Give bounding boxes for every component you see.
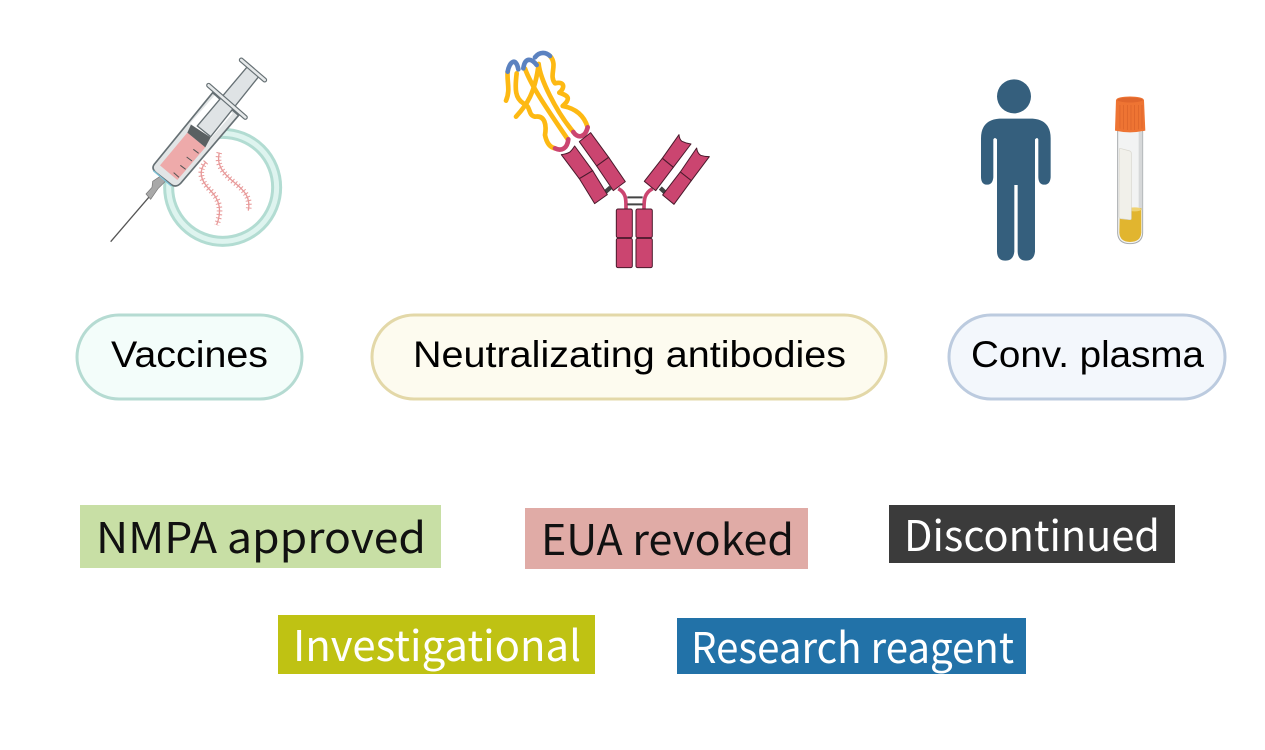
legend tag: Research reagent: Research reagent: [691, 615, 1014, 676]
vesicle ring: [169, 133, 277, 241]
legend tag: Discontinued: Discontinued: [904, 503, 1160, 564]
cap: [1115, 98, 1145, 132]
left arm, inner: [579, 133, 609, 166]
barrel: [153, 93, 239, 186]
left arm, outer: [561, 146, 593, 179]
tube body: [1118, 130, 1143, 244]
icon: syringe and mRNA vesicle: [111, 60, 281, 245]
antibody chains: [561, 133, 709, 268]
legend tag: EUA revoked: EUA revoked: [541, 507, 794, 568]
legend tag: NMPA approved: NMPA approved: [96, 505, 426, 566]
barrel flange: [209, 85, 245, 117]
paper label: [1119, 148, 1131, 220]
stem: [616, 209, 632, 238]
mRNA strands: [201, 153, 249, 225]
icon: person: [981, 79, 1051, 261]
pill: Conv. plasma: [949, 315, 1225, 399]
plasma: [1119, 208, 1141, 242]
right arm, outer: [680, 148, 709, 181]
pill: Neutralizating antibodies: Neutralizating antibodies: [413, 334, 846, 375]
pill: Vaccines: Vaccines: [111, 334, 268, 375]
legend tag: Investigational: Investigational: [293, 613, 581, 674]
graduations: [174, 149, 199, 177]
plunger: [197, 67, 259, 137]
rubber stopper: [187, 125, 211, 147]
right arm, inner: [662, 135, 691, 167]
pill: Neutralizating antibodies: [372, 315, 886, 399]
pill: Conv. plasma: Conv. plasma: [971, 334, 1204, 375]
pill: Vaccines: [77, 315, 302, 399]
antibody hinge: [618, 189, 653, 209]
pink liquid: [160, 133, 205, 180]
barrel window: [190, 95, 233, 139]
icon: neutralizing antibody with antigen: [506, 53, 709, 268]
icon: blood plasma tube: [1115, 97, 1145, 244]
antigen ribbon: [506, 53, 588, 150]
needle: [111, 197, 149, 242]
